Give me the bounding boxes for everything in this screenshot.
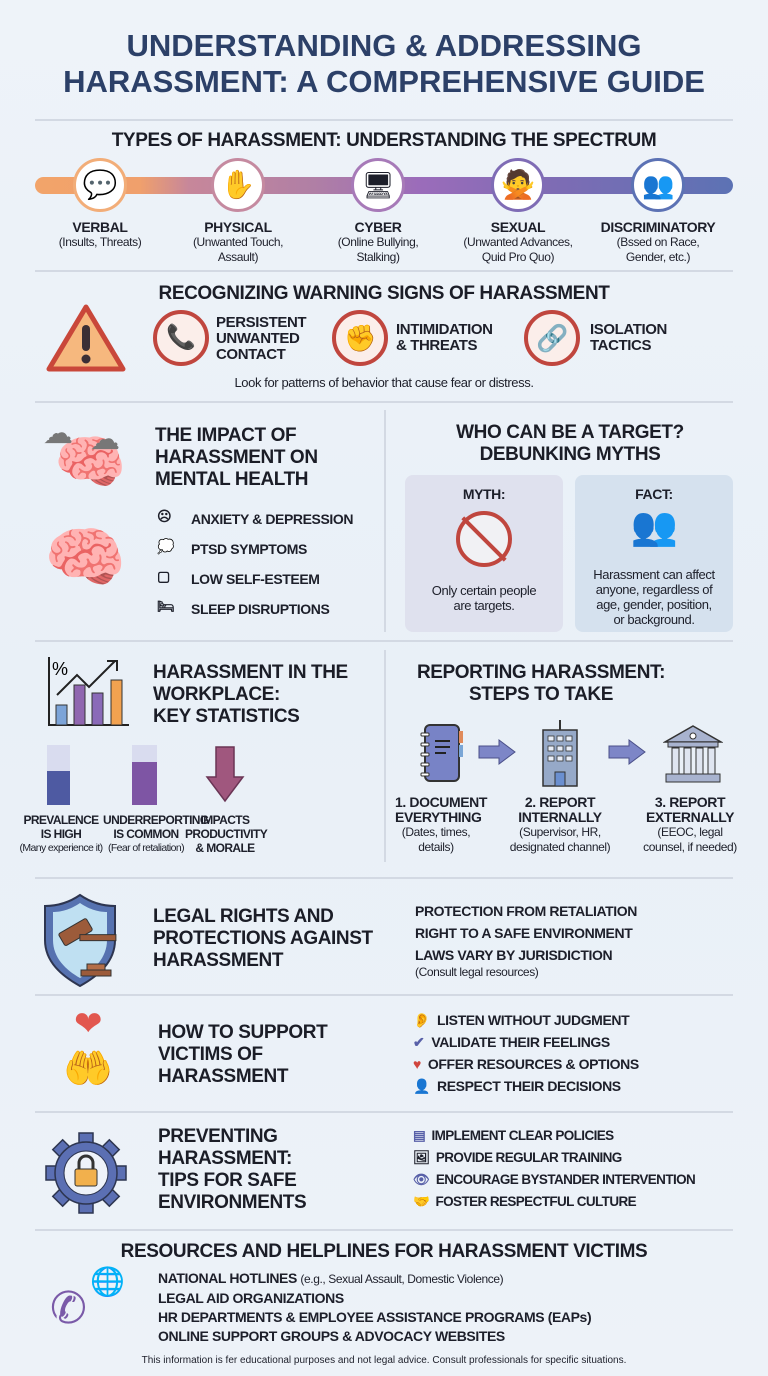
list: rights: RIGHT TO A SAFE ENVIRONMENT <box>415 925 632 941</box>
heading: preventing <box>158 1126 306 1213</box>
list: effects <box>157 508 353 617</box>
icon: phone and globe: 🌐 <box>90 1266 124 1297</box>
labels: types: SEXUAL <box>491 219 545 235</box>
list: resources: ONLINE SUPPORT GROUPS & ADVOCACY WEBSITES <box>158 1328 505 1344</box>
icon: verbal: 💬 <box>83 169 117 200</box>
list: rights <box>415 903 637 979</box>
labels: steps <box>395 794 488 854</box>
heading: who can be target: DEBUNKING MYTHS <box>480 444 660 465</box>
panel: reporting steps: designated channel) <box>510 840 610 854</box>
labels: types: VERBAL <box>72 219 128 235</box>
heading: workplace: HARASSMENT IN THE <box>153 662 348 683</box>
panel: legal rights <box>44 894 637 987</box>
labels: types: PHYSICAL <box>204 219 272 235</box>
box: myth: are targets. <box>454 598 514 613</box>
heading: support: HOW TO SUPPORT <box>158 1022 327 1043</box>
icon: physical: ✋ <box>221 169 255 200</box>
bar: underreporting <box>132 745 157 805</box>
heading: support: HARASSMENT <box>158 1066 288 1087</box>
icon: discriminatory <box>631 158 685 212</box>
list: support <box>413 1012 639 1094</box>
panel: workplace statistics: IS COMMON <box>113 827 179 841</box>
list: resources: LEGAL AID ORGANIZATIONS <box>158 1290 344 1306</box>
box: fact: age, gender, position, <box>596 597 712 612</box>
panel: reporting steps: 3. REPORT <box>655 794 725 810</box>
heading: reporting: REPORTING HARASSMENT: <box>417 662 665 683</box>
list: effects: 🛏 <box>157 598 174 614</box>
panel: myths <box>405 422 733 632</box>
caption: warning signs: Look for patterns of behavior that cause fear or distress. <box>234 375 534 390</box>
icon: hands with heart: ❤ <box>74 1005 102 1043</box>
title: HARASSMENT: A COMPREHENSIVE GUIDE <box>63 64 705 99</box>
labels: types: (Online Bullying, <box>338 235 418 249</box>
icon: hands with heart <box>63 1005 113 1091</box>
panel: reporting steps: 2. REPORT <box>525 794 595 810</box>
labels: types: Stalking) <box>356 250 400 264</box>
labels: stats <box>19 813 103 854</box>
icon: building <box>542 720 578 787</box>
heading: reporting: STEPS TO TAKE <box>469 684 613 705</box>
icon: brain with storm: 🧠 <box>54 430 126 495</box>
icon: shield with gavel <box>44 894 116 987</box>
warning sign items: CONTACT <box>216 346 285 363</box>
heading: who can be target <box>456 422 684 465</box>
arrow: step 2 to 3 <box>608 739 646 765</box>
heading: legal: PROTECTIONS AGAINST <box>153 928 373 949</box>
heading: preventing: HARASSMENT: <box>158 1148 292 1169</box>
icon: sexual: 🙅 <box>501 169 535 200</box>
warning sign items: PERSISTENT <box>216 314 306 331</box>
panel: mental health: ☁ <box>43 417 73 450</box>
list: prevention tips: ▤ IMPLEMENT CLEAR POLICIES <box>413 1128 614 1143</box>
list: support: 👂 LISTEN WITHOUT JUDGMENT <box>413 1012 629 1028</box>
box: fact: or background. <box>613 612 695 627</box>
warning sign items: UNWANTED <box>216 330 299 347</box>
warning sign items: 🔗 <box>536 323 568 353</box>
labels: types: DISCRIMINATORY <box>601 219 715 235</box>
panel: support victims <box>63 1005 639 1094</box>
panel: reporting steps: counsel, if needed) <box>643 840 737 854</box>
heading: impact: MENTAL HEALTH <box>155 469 308 490</box>
list: prevention tips: 👁 ENCOURAGE BYSTANDER INTERVENTION <box>413 1172 695 1187</box>
box: myth: Only certain people <box>432 583 536 598</box>
title <box>63 28 705 99</box>
labels: steps: (Dates, times, <box>402 825 470 839</box>
heading: workplace <box>153 662 348 727</box>
list: resources: HR DEPARTMENTS & EMPLOYEE ASSISTANCE PROGRAMS (EAPs) <box>158 1309 591 1325</box>
list: effects: LOW SELF-ESTEEM <box>191 571 320 587</box>
icon: down arrow <box>206 746 244 802</box>
panel: workplace statistics: IMPACTS <box>201 813 249 827</box>
spectrum track <box>35 177 733 194</box>
labels: steps: EVERYTHING <box>395 809 482 825</box>
labels: stats: IS HIGH <box>41 827 81 841</box>
list: support: ✔ VALIDATE THEIR FEELINGS <box>413 1034 610 1050</box>
list: rights: LAWS VARY BY JURISDICTION <box>415 947 612 963</box>
heading: preventing: PREVENTING <box>158 1126 278 1147</box>
panel: mental health: ☁ <box>90 423 120 456</box>
list: resources: NATIONAL HOTLINES (e.g., Sexual Assault, Domestic Violence) <box>158 1270 503 1286</box>
warning sign items: INTIMIDATION <box>396 321 493 338</box>
panel: reporting steps: (Supervisor, HR, <box>519 825 601 839</box>
panel: workplace statistics: (Fear of retaliation) <box>108 842 184 854</box>
heading: workplace: WORKPLACE: <box>153 684 280 705</box>
box: myth <box>405 475 563 632</box>
list: prevention tips <box>413 1128 695 1209</box>
icon: gear with lock <box>45 1132 127 1214</box>
icon: verbal <box>73 158 127 212</box>
icon: hands with heart: 🤲 <box>63 1047 113 1091</box>
list: effects: ▢ <box>157 568 170 584</box>
icon: physical <box>211 158 265 212</box>
box: fact: 👥 <box>631 506 677 548</box>
list: resources <box>158 1270 591 1344</box>
labels: types: (Bssed on Race, <box>617 235 699 249</box>
icon: notebook <box>420 724 463 782</box>
heading: impact: HARASSMENT ON <box>155 447 318 468</box>
list: rights: PROTECTION FROM RETALIATION <box>415 903 637 919</box>
labels: stats: (Many experience it) <box>19 842 103 854</box>
box: myth: MYTH: <box>463 486 505 502</box>
panel: workplace statistics: PRODUCTIVITY <box>185 827 267 841</box>
icon: discriminatory: 👥 <box>642 170 674 200</box>
warning sign items: TACTICS <box>590 337 651 354</box>
list: support: ♥ OFFER RESOURCES & OPTIONS <box>413 1056 639 1072</box>
icons: type circles <box>73 158 685 212</box>
warning sign items: ✊ <box>344 323 376 353</box>
icon: phone and globe: ✆ <box>50 1284 86 1333</box>
panel: reporting steps: (EEOC, legal <box>657 825 723 839</box>
heading: support: VICTIMS OF <box>158 1044 263 1065</box>
panel: prevention <box>45 1126 695 1214</box>
box: fact <box>575 475 733 632</box>
panel: workplace statistics <box>19 657 348 855</box>
heading: legal: LEGAL RIGHTS AND <box>153 906 333 927</box>
list: prevention tips: 🖼 PROVIDE REGULAR TRAINING <box>413 1150 622 1165</box>
box: fact: Harassment can affect <box>593 567 715 582</box>
panel: workplace statistics: & MORALE <box>195 841 255 855</box>
warning sign items: 📞 <box>166 324 196 351</box>
panel: mental health <box>43 417 353 617</box>
heading: preventing: ENVIRONMENTS <box>158 1192 306 1213</box>
labels: types: (Unwanted Advances, <box>463 235 573 249</box>
icon: chart: % <box>52 659 68 679</box>
panel: reporting steps: INTERNALLY <box>518 809 602 825</box>
labels: steps: 1. DOCUMENT <box>395 794 487 810</box>
heading: warning signs: RECOGNIZING WARNING SIGNS OF HARASSMENT <box>159 283 609 304</box>
icon: cyber: 🖥 <box>362 170 394 200</box>
heading: preventing: TIPS FOR SAFE <box>158 1170 296 1191</box>
list: effects: ANXIETY & DEPRESSION <box>191 511 353 527</box>
labels: types: (Unwanted Touch, <box>193 235 283 249</box>
arrow: step 1 to 2 <box>478 739 516 765</box>
warning sign items <box>153 310 667 366</box>
panel: reporting steps <box>395 662 737 854</box>
labels: types: Gender, etc.) <box>626 250 690 264</box>
footer disclaimer: This information is fer educational purposes and not legal advice. Consult professionals for specific situations. <box>142 1355 626 1366</box>
icon: warning triangle <box>46 304 126 372</box>
heading: legal: HARASSMENT <box>153 950 283 971</box>
list: effects: 💭 <box>157 538 174 554</box>
icon: brain: 🧠 <box>44 520 126 594</box>
heading: workplace: KEY STATISTICS <box>153 706 299 727</box>
list: effects: ☹ <box>157 508 171 524</box>
list: support: 👤 RESPECT THEIR DECISIONS <box>413 1078 621 1094</box>
warning sign items: ISOLATION <box>590 321 667 338</box>
panel: reporting steps: EXTERNALLY <box>646 809 734 825</box>
heading: reporting <box>417 662 665 705</box>
bar: prevalence <box>47 745 70 805</box>
list: prevention tips: 🤝 FOSTER RESPECTFUL CULTURE <box>413 1194 636 1209</box>
icon: sexual <box>491 158 545 212</box>
icon: courthouse <box>663 725 723 782</box>
heading: support <box>158 1022 328 1087</box>
heading: impact: THE IMPACT OF <box>155 425 296 446</box>
heading: who can be target: WHO CAN BE A TARGET? <box>456 422 684 443</box>
icon: cyber <box>351 158 405 212</box>
labels: types: Quid Pro Quo) <box>482 250 554 264</box>
icon: phone and globe <box>50 1266 124 1333</box>
heading: legal <box>153 906 373 971</box>
labels: steps: details) <box>418 840 454 854</box>
list: effects: PTSD SYMPTOMS <box>191 541 307 557</box>
box: fact: anyone, regardless of <box>596 582 712 597</box>
list: rights: (Consult legal resources) <box>415 965 538 979</box>
heading: resources: RESOURCES AND HELPLINES FOR HARASSMENT VICTIMS <box>121 1241 647 1262</box>
heading: impact <box>155 425 318 490</box>
labels: types <box>59 219 716 264</box>
box: fact: FACT: <box>635 486 673 502</box>
heading: types: TYPES OF HARASSMENT: UNDERSTANDING THE SPECTRUM <box>112 130 656 151</box>
labels: types: (Insults, Threats) <box>59 235 141 249</box>
panel: workplace statistics: UNDERREPORTING <box>103 813 209 827</box>
labels: types: CYBER <box>354 219 402 235</box>
labels: types: Assault) <box>218 250 258 264</box>
list: effects: SLEEP DISRUPTIONS <box>191 601 329 617</box>
labels: stats: PREVALENCE <box>23 813 99 827</box>
warning sign items: & THREATS <box>396 337 477 354</box>
title: UNDERSTANDING & ADDRESSING <box>127 28 641 63</box>
icon: chart <box>48 657 129 726</box>
